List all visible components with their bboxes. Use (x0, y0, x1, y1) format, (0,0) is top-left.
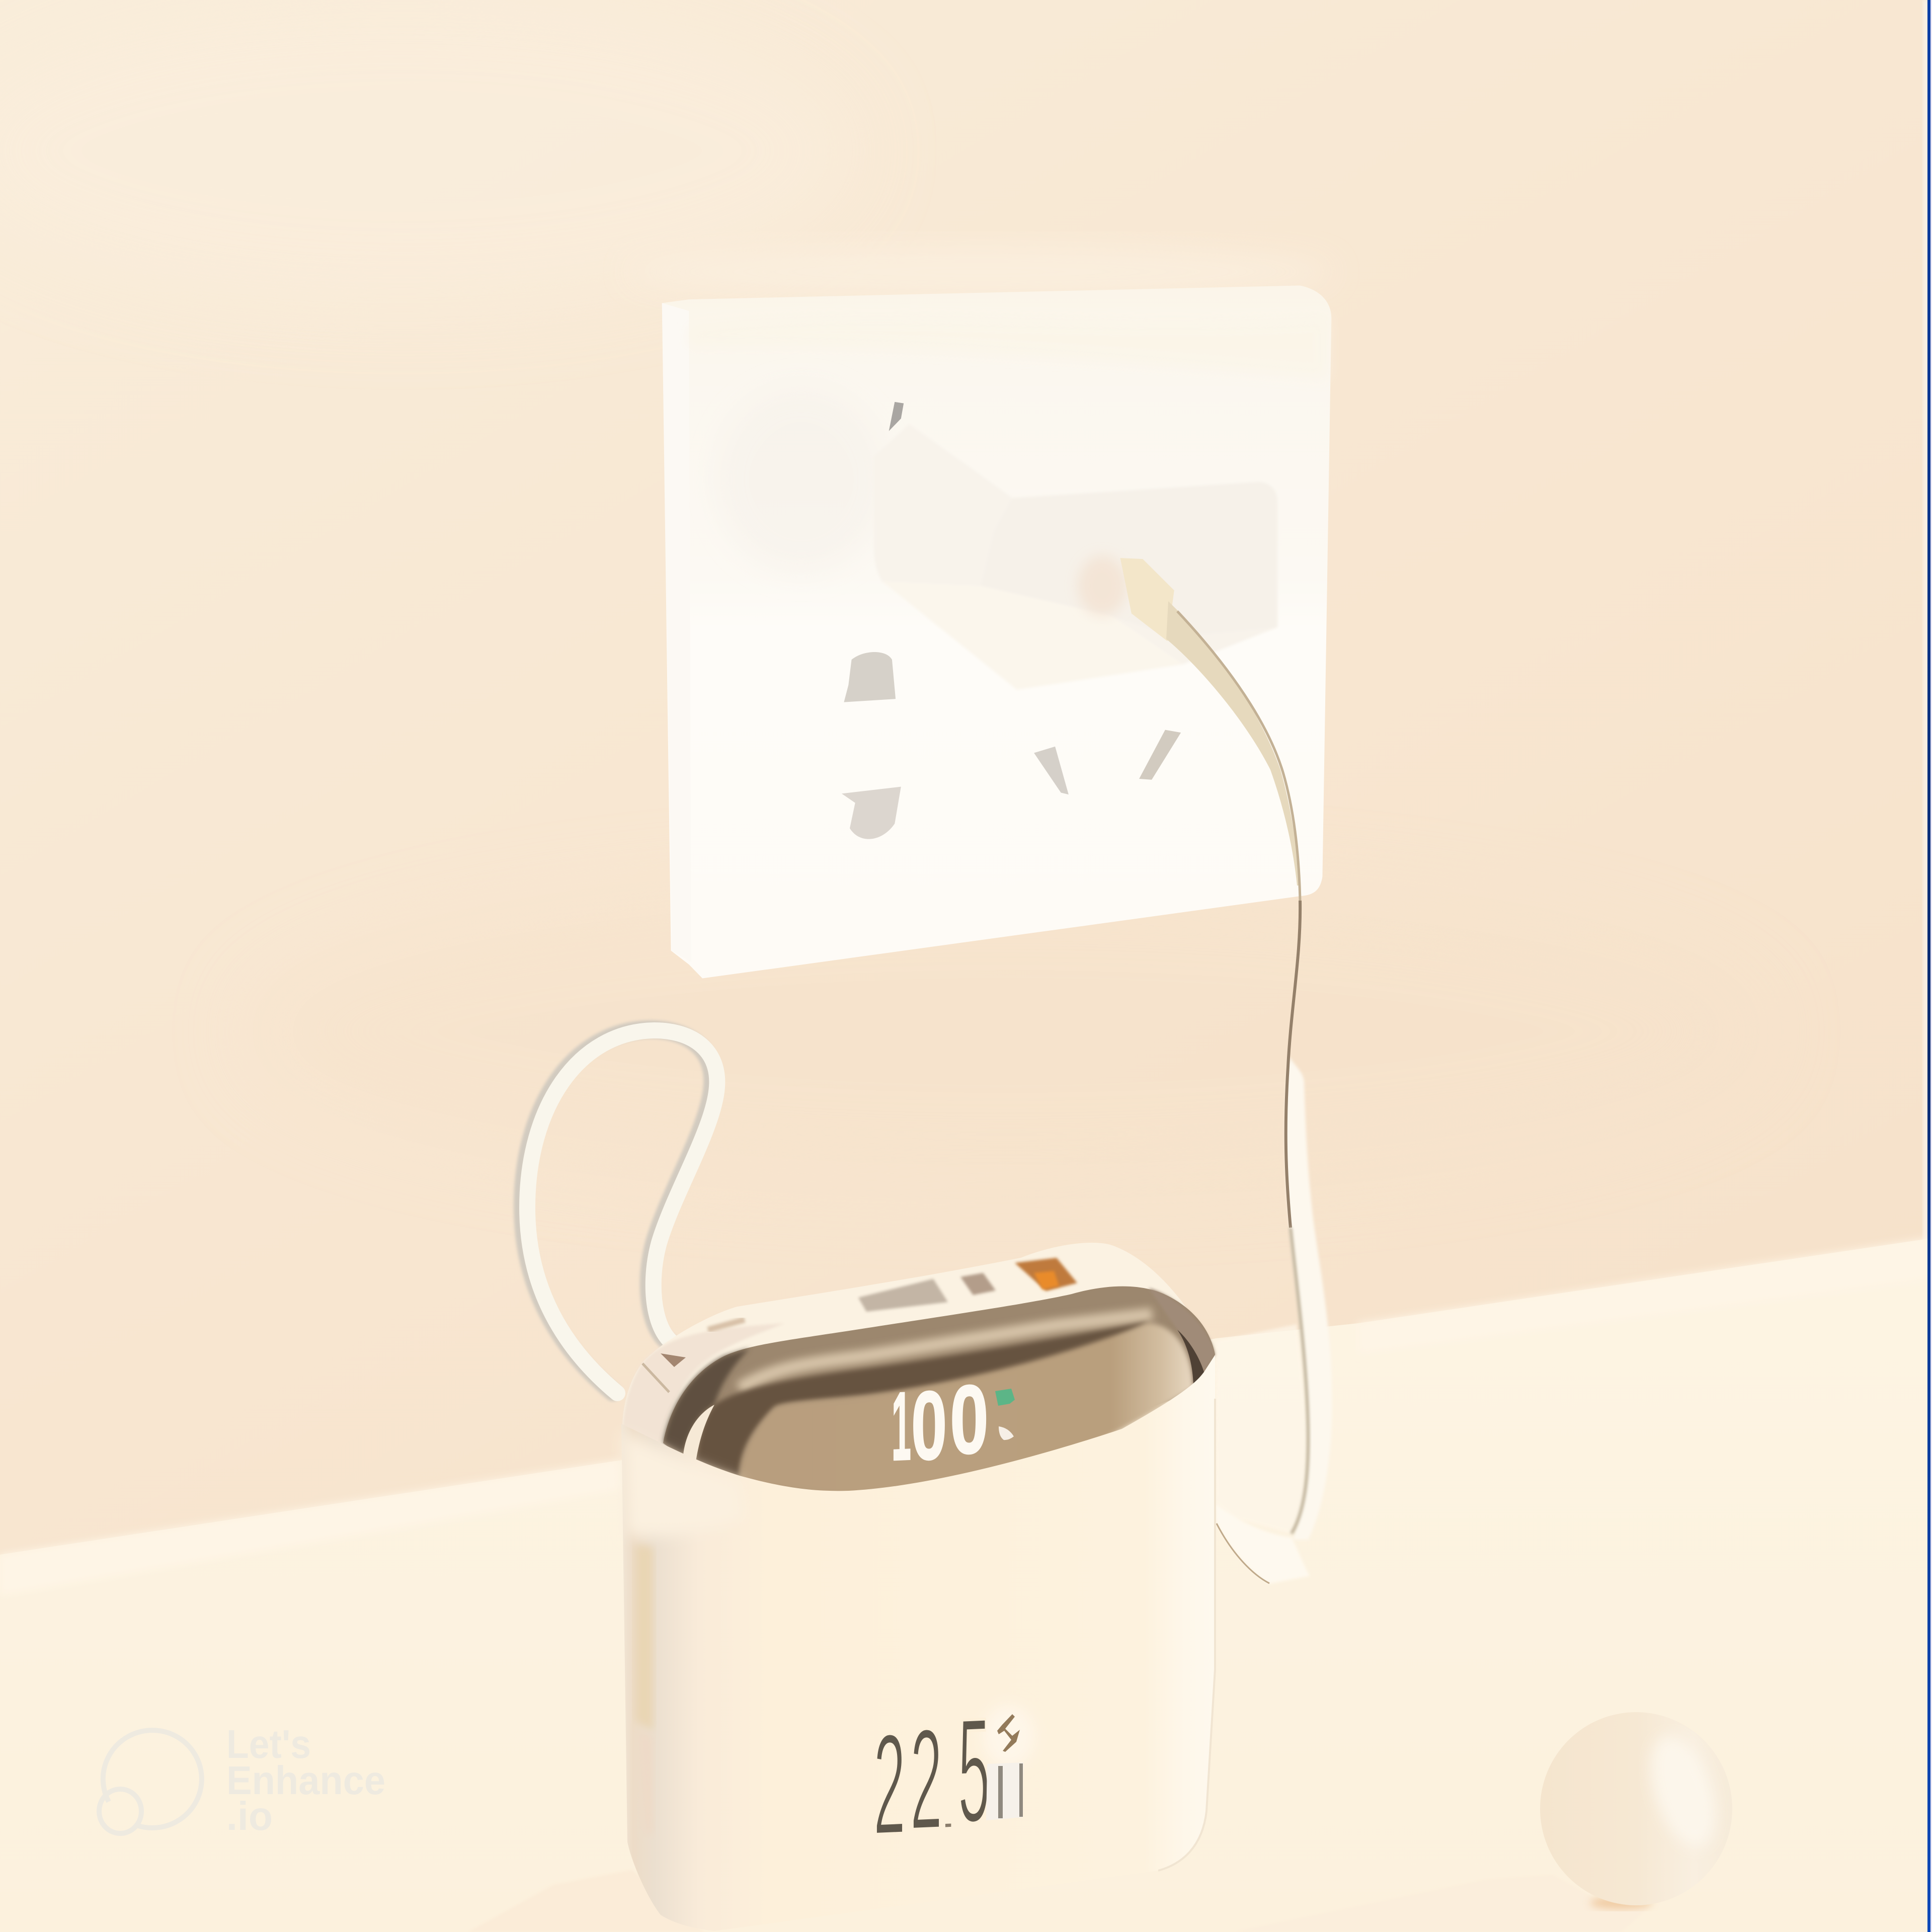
cable light edge line (1291, 1228, 1308, 1534)
socket hole: earth lower (842, 787, 901, 839)
USB-A port orange (1015, 1258, 1077, 1291)
wall socket plate (662, 286, 1331, 979)
socket hole: earth upper (844, 652, 896, 702)
charging cable from charger to power bank (1166, 601, 1332, 1584)
USB-C plug on charger (1120, 558, 1174, 641)
floor surface (0, 1238, 1932, 1932)
wall charger block (874, 424, 1277, 690)
22.5W printed label (873, 1687, 1035, 1866)
22.5W printed label: 2 (910, 1699, 942, 1861)
battery display 100 (892, 1364, 1015, 1481)
watermark logo (99, 1730, 202, 1833)
marble ball on floor (1540, 1712, 1732, 1909)
drop indicator (999, 1426, 1014, 1440)
looped retractable cable on power bank (523, 1029, 717, 1393)
ribbon base on floor (1215, 1503, 1310, 1584)
battery display 100: 0 (950, 1364, 989, 1474)
watermark text: Enhance (226, 1758, 385, 1803)
22.5W printed label: 5 (958, 1687, 990, 1854)
port grey small (960, 1273, 996, 1295)
inner dark band (696, 1322, 1150, 1476)
cable dark edge line (1286, 901, 1300, 1228)
watermark: Let's Enhance .io (99, 1722, 385, 1838)
socket hole: slanted left (1034, 747, 1069, 794)
lightning bolt glyph (997, 1714, 1020, 1752)
blue right edge line (1927, 0, 1932, 1932)
battery display 100: 1 (892, 1372, 911, 1481)
pocket tan strip (635, 1545, 653, 1731)
22.5W printed label: . (940, 1800, 956, 1834)
floor wedge under ball (1233, 1875, 1650, 1932)
white flat ribbon section (1285, 1057, 1332, 1540)
brown mark near cable (661, 1353, 686, 1367)
cream highlight strip (683, 1405, 714, 1462)
22.5W printed label: 2 (873, 1704, 906, 1866)
power bank front pocket (621, 1355, 1215, 1931)
battery display 100: 0 (911, 1371, 947, 1480)
floor loop inside cable (1215, 1324, 1308, 1534)
wattage bars (986, 1762, 1023, 1820)
watermark text: .io (226, 1794, 273, 1838)
right rim (1149, 1288, 1215, 1385)
metal display panel (663, 1286, 1215, 1509)
socket hole: slanted right (1139, 730, 1181, 780)
left dark band (663, 1348, 750, 1455)
watermark text: Let's (226, 1722, 311, 1766)
pocket top left lighter band (622, 1432, 745, 1537)
port grey wide (858, 1279, 948, 1312)
floor wedge near power bank (468, 1870, 704, 1932)
power bank top face with ports (622, 1243, 1215, 1459)
screen face (740, 1323, 1193, 1499)
pocket edge outline (1158, 1399, 1215, 1871)
power bank (621, 1243, 1215, 1931)
screw (889, 402, 904, 431)
watermark text (226, 1722, 385, 1838)
green indicator (995, 1389, 1015, 1406)
